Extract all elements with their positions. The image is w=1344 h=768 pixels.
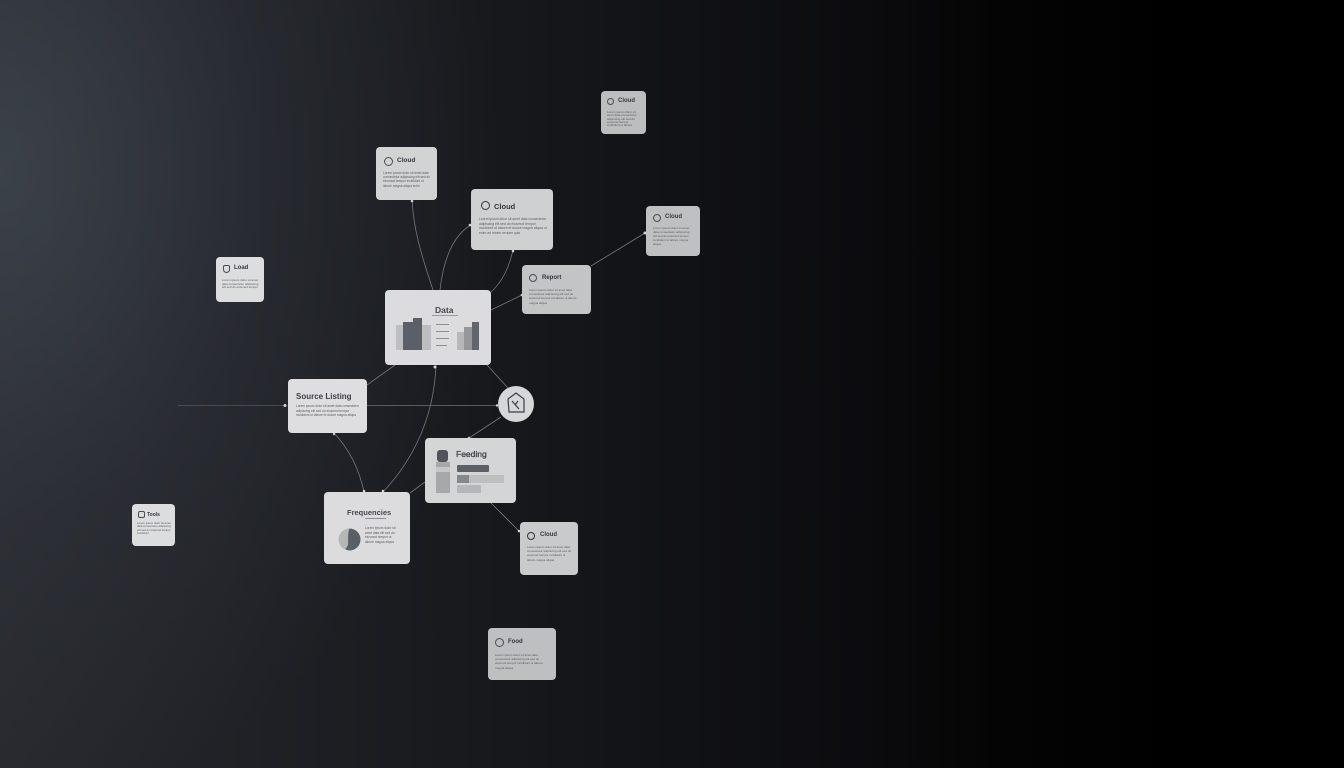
icon: cube [138, 511, 145, 518]
line: source card to pie card [334, 433, 364, 492]
icon: shield [529, 274, 537, 282]
card: bottom note [488, 628, 556, 680]
heading: Cloud [397, 157, 415, 164]
heading: Source Listing [296, 392, 352, 401]
heading: Food [508, 639, 523, 645]
text: Lorem ipsum dolor sit amet data elit sed do eiusmod tempor ut labore magna aliqua [365, 526, 395, 544]
card: centre upper note [471, 189, 553, 250]
line: data card to pie card [383, 365, 436, 492]
text: Lorem ipsum dolor sit amet data consectetur adipiscing elit sed do eiusmod tempor incididunt ut labore et dolore magna aliqua [296, 404, 359, 417]
bar: light [457, 485, 481, 493]
heading: Cloud [494, 202, 515, 211]
line: circle to feeding card [469, 417, 501, 438]
line: data card to source card [367, 365, 395, 385]
icon: clock [481, 201, 490, 210]
heading: Report [542, 275, 561, 281]
card: data [385, 290, 491, 365]
heading rule [365, 518, 386, 519]
line: feeding card to card G [491, 503, 520, 532]
card: right note [646, 206, 700, 256]
card: top right note [601, 91, 646, 134]
icon: circular envelope node [498, 386, 534, 422]
text: Lorem ipsum dolor sit amet data consectetur adipiscing elit sed do eiusmod tempor incididunt ut labore magna aliqua [527, 545, 571, 562]
card: feeding [425, 438, 516, 503]
line: data card to card B [412, 200, 433, 290]
icon: face [653, 214, 661, 222]
card: upper left note [376, 147, 437, 200]
heading: Load [234, 265, 248, 271]
legend lines [436, 324, 449, 346]
card: proportions [324, 492, 410, 564]
icon: shield [223, 265, 230, 273]
text: Lorem ipsum dolor sit amet data consectetur adipiscing elit sed do eiusmod tempor incididunt ut labore magna aliqua [495, 653, 543, 670]
line: data card to card E [491, 295, 522, 310]
line: feeding card to pie card [410, 482, 425, 493]
text: Lorem ipsum dolor sit amet data consectetur adipiscing elit sed do eiusmod tempor incididunt ut labore et dolore magna aliqua ut enim ad minim veniam quis [479, 217, 547, 234]
text: Lorem ipsum dolor sit amet data consectetur adipiscing elit sed do eiusmod tempor incididunt ut labore magna aliqua enim [383, 171, 430, 188]
line: card E to card D [591, 233, 645, 266]
icon: currency [384, 157, 393, 166]
line: data card to card C [440, 225, 471, 290]
heading: Frequencies [347, 508, 391, 517]
icon: bottle [436, 450, 450, 493]
chart: pie [338, 528, 360, 550]
line: data card to circle [487, 365, 508, 388]
heading: Cloud [540, 532, 557, 538]
heading: Feeding [456, 449, 487, 459]
icon: ring [495, 638, 504, 647]
heading: Tools [147, 512, 160, 518]
line: data card to card C lower [491, 250, 513, 292]
bar: dark [457, 465, 489, 472]
line: input to source card [178, 404, 287, 406]
heading: Cloud [618, 98, 635, 104]
connector dots [284, 200, 646, 532]
card: source listing [288, 379, 367, 433]
text: Lorem ipsum dolor sit amet data consectetur adipiscing elit sed do eiusmod tempor incididunt ut labore magna aliqua [529, 288, 577, 305]
line: source card to circle [367, 404, 498, 406]
heading: Data [435, 305, 453, 315]
card: adjoining note [522, 265, 591, 314]
card: far left note [132, 504, 175, 546]
bar: mid [457, 475, 504, 483]
card: left note [216, 257, 264, 302]
chart: right bars [457, 322, 479, 350]
chart: left bars [396, 318, 431, 350]
icon: clock [607, 98, 614, 105]
heading: Cloud [665, 214, 682, 220]
heading rule [432, 315, 458, 316]
card: lower right note [520, 522, 578, 575]
icon: gear [527, 532, 535, 540]
